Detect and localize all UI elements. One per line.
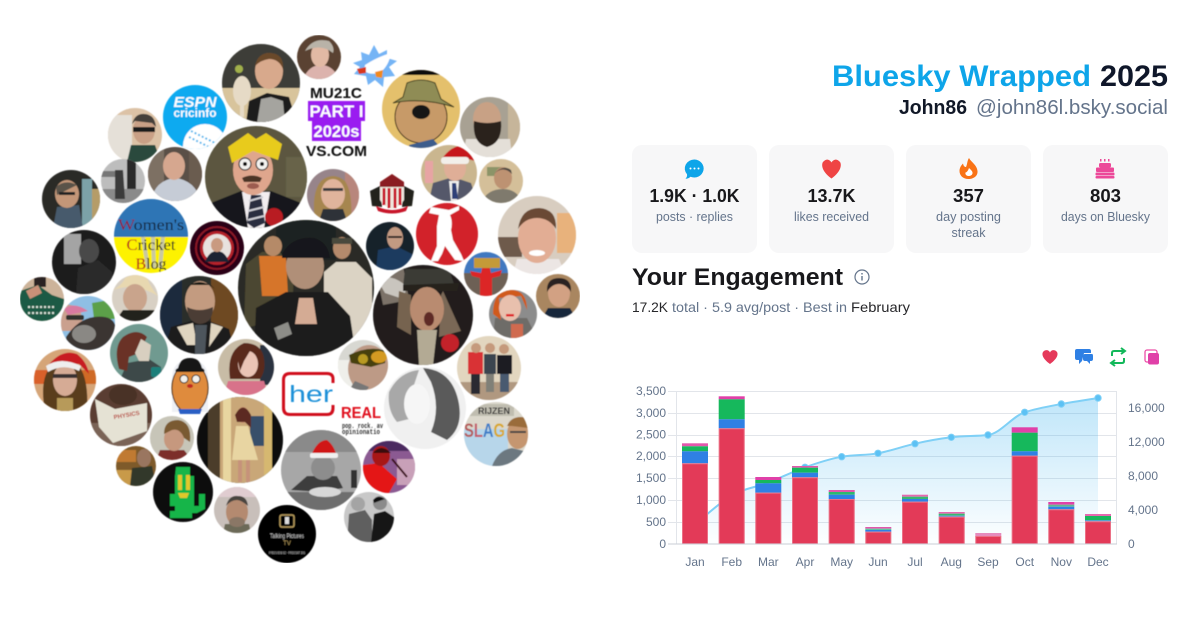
month labels: Jan [685,555,705,569]
bar: Mar [755,477,781,544]
logo: Cher [284,374,333,414]
stat card: likes received: likes received [794,210,869,224]
avatar: two men black and white [344,492,394,542]
right axis labels: 16,000 [1128,401,1165,415]
avatar: big smiling man [498,196,576,274]
avatar: bald man in navy suit [366,222,414,270]
avatar bubble cloud [20,35,580,563]
engagement heading: Your Engagement [632,264,843,291]
stat card: day posting streak: day posting [936,210,1001,224]
chart legend [1042,348,1159,366]
stat card: day posting streak [906,145,1031,253]
month labels: Nov [1051,555,1072,569]
bar: Feb [719,396,745,544]
bar: May [829,490,855,544]
month labels: Apr [796,555,814,569]
stat card: days on Bluesky: 803 [1090,186,1121,206]
logo: REAL pop rock: REAL [341,405,381,422]
month labels: May [830,555,853,569]
avatar: cartoon bear in bush hat [382,70,460,148]
bar: Jun [865,527,891,544]
avatar: woman in floral dress mirror selfie [197,397,283,483]
avatar: large group scene with man praying [238,220,374,356]
user name and handle: @john86l.bsky.social [976,97,1168,119]
user name and handle: John86 [899,97,967,119]
logo: MU21C Part I 2020s VS.COM [306,85,367,160]
avatar: Women's Cricket Blog logo: Women's [118,217,184,234]
title: Bluesky Wrapped [832,60,1091,93]
bar: Jul [902,495,928,544]
avatar: Talking Pictures TV logo: Talking Pictures [270,534,304,540]
avatar: Sunderland crest [370,174,414,214]
avatar: man at Kilimanjaro sign [464,252,508,296]
logo: REAL pop rock [341,405,384,437]
combined bar and line chart [636,384,1165,569]
icon: legend chat replies [1075,349,1093,364]
cumulative line [695,398,1098,524]
month labels: Dec [1087,555,1109,569]
bar inner highlight [682,429,1110,544]
avatar: Women's Cricket Blog logo [114,199,188,274]
engagement summary [632,299,910,315]
avatar: black and white woman [384,367,466,449]
bar: Dec [1085,514,1111,544]
bar: Nov [1048,502,1074,544]
left axis labels: 3,500 [636,384,666,398]
avatar: woman with orange hair [489,290,537,338]
avatar: witch-like man in black hat [373,265,473,365]
left axis labels: 0 [659,537,666,551]
icon: legend repost [1111,348,1125,366]
avatar: man in front of colorful letters: RIJZEN [478,406,510,416]
logo: Cher: her [289,381,333,407]
right axis labels [1128,401,1165,551]
avatar: cartoon potato with hat [172,358,208,414]
avatar: man in red ring [190,221,244,275]
avatar: duck on blue star [353,45,397,87]
stat card: likes received [769,145,894,253]
avatar: person reading book: PHYSICS [113,411,140,421]
stat card: posts and replies: 1.9K · 1.0K [650,186,740,206]
right axis labels: 0 [1128,537,1135,551]
logo: REAL pop rock: opinionatio [342,429,380,437]
avatar: man with beard and leather coat [160,276,238,354]
left axis labels: 3,000 [636,406,666,420]
user name and handle [899,97,1168,119]
bar: Apr [792,466,818,544]
avatar: Women's Cricket Blog logo: Cricket [126,237,176,254]
avatar: woman in vintage hat [297,35,341,79]
icon: heart [822,160,841,178]
stat card: posts and replies [632,145,757,253]
avatar: gray-bearded man outdoors [214,487,260,533]
engagement summary: February [851,299,910,315]
avatar: ESPNcricinfo logo: ESPN [174,94,218,111]
avatar: black and white street photo [101,159,145,203]
left axis labels: 2,000 [636,449,666,463]
right axis labels: 4,000 [1128,503,1158,517]
avatar: woman with dark red hair [218,339,274,395]
icon: info [855,270,869,284]
left axis labels [636,384,666,551]
icon: cake [1096,159,1114,178]
avatar: green pixel cactus [153,462,213,522]
avatar: black and white man by window [52,230,116,294]
month labels: Jul [907,555,923,569]
month labels [685,555,1109,569]
avatar: bald man in pale shirt [148,147,202,201]
engagement summary: total · 5.9 avg/post · Best in [672,299,847,315]
avatar: older man in straw hat [112,275,158,321]
avatar: person in Christmas sweater with phone [20,275,64,321]
left axis labels: 500 [646,515,666,529]
avatar: man in front of colorful letters: SLAG [464,421,505,442]
right axis labels: 12,000 [1128,435,1165,449]
avatar: woman in Santa hat and glasses [34,349,96,411]
avatar: person reading book [90,384,152,447]
left axis labels: 2,500 [636,428,666,442]
month labels: Aug [941,555,962,569]
right axis labels: 8,000 [1128,469,1158,483]
month labels: Sep [977,555,999,569]
month labels: Mar [758,555,779,569]
avatar: woman with pug dog [61,296,115,350]
bar: Aug [939,512,965,544]
title: 2025 [1100,60,1168,93]
avatar: Talking Pictures TV logo: FREEVIEW 82 · FREESAT 306 [269,551,305,555]
stacked bars [682,396,1111,544]
engagement summary: 17.2K [632,299,669,315]
bar: Oct [1012,427,1038,544]
left axis labels: 1,500 [636,471,666,485]
avatar: bearded man [460,97,520,157]
icon: legend heart likes [1042,350,1058,364]
avatar: man at blackboard [221,43,301,123]
stat card: days on Bluesky: days on Bluesky [1061,210,1151,224]
avatar: ESPNcricinfo logo: cricinfo [174,106,216,120]
icon: chat bubble [685,159,704,179]
avatar: man in Santa hat [421,145,477,201]
avatar: smiling woman with glasses [307,169,359,221]
stat card: days on Bluesky [1043,145,1168,253]
avatar: man with curly hair [150,416,194,460]
month labels: Jun [868,555,888,569]
logo: REAL pop rock: pop. rock. av [342,423,384,431]
avatar: ESPNcricinfo logo [162,84,228,150]
avatar: woman in dark top [536,274,580,318]
month labels: Feb [721,555,742,569]
left axis labels: 1,000 [636,493,666,507]
stat card: day posting streak: 357 [953,186,984,206]
avatar: man in front of colorful letters [464,402,529,466]
logo: MU21C Part I 2020s VS.COM: 2020s [314,122,360,141]
bar: Sep [975,533,1001,544]
avatar: red cricketer logo [416,203,478,265]
avatar: man looking sideways in doorway [42,170,100,228]
bar: Jan [682,443,708,544]
stat card: posts and replies: posts · replies [656,210,733,224]
avatar: man on beige wall [479,159,523,203]
avatar: illustrated woman with ponytail [110,324,168,382]
month labels: Oct [1015,555,1035,569]
avatar: man at bookshelf [116,446,156,486]
icon: legend quotes [1145,350,1159,364]
avatar: man in yellow sunglasses [338,340,390,393]
avatar: singer in red light [363,441,415,493]
avatar: Women's Cricket Blog logo: Blog [136,256,167,273]
area under cumulative line [695,398,1098,544]
avatar: Talking Pictures TV logo [258,505,316,563]
avatar: man with glasses and newspaper [108,108,162,162]
stat card: likes received: 13.7K [808,186,856,206]
avatar: three men standing [457,336,521,400]
avatar: man with yellow hat and goggle glasses [205,126,308,228]
logo: MU21C Part I 2020s VS.COM: VS.COM [306,143,367,160]
line points [802,395,1101,470]
avatar: Talking Pictures TV logo: TV [283,541,291,547]
stat card: day posting streak: streak [952,226,986,240]
baseline axis [668,543,1117,545]
grid lines [668,391,1117,544]
icon: flame [960,158,978,179]
logo: MU21C Part I 2020s VS.COM: PART I [310,102,364,121]
logo: MU21C Part I 2020s VS.COM: MU21C [310,85,362,102]
avatar: black and white man eating with Santa hat [281,430,361,510]
